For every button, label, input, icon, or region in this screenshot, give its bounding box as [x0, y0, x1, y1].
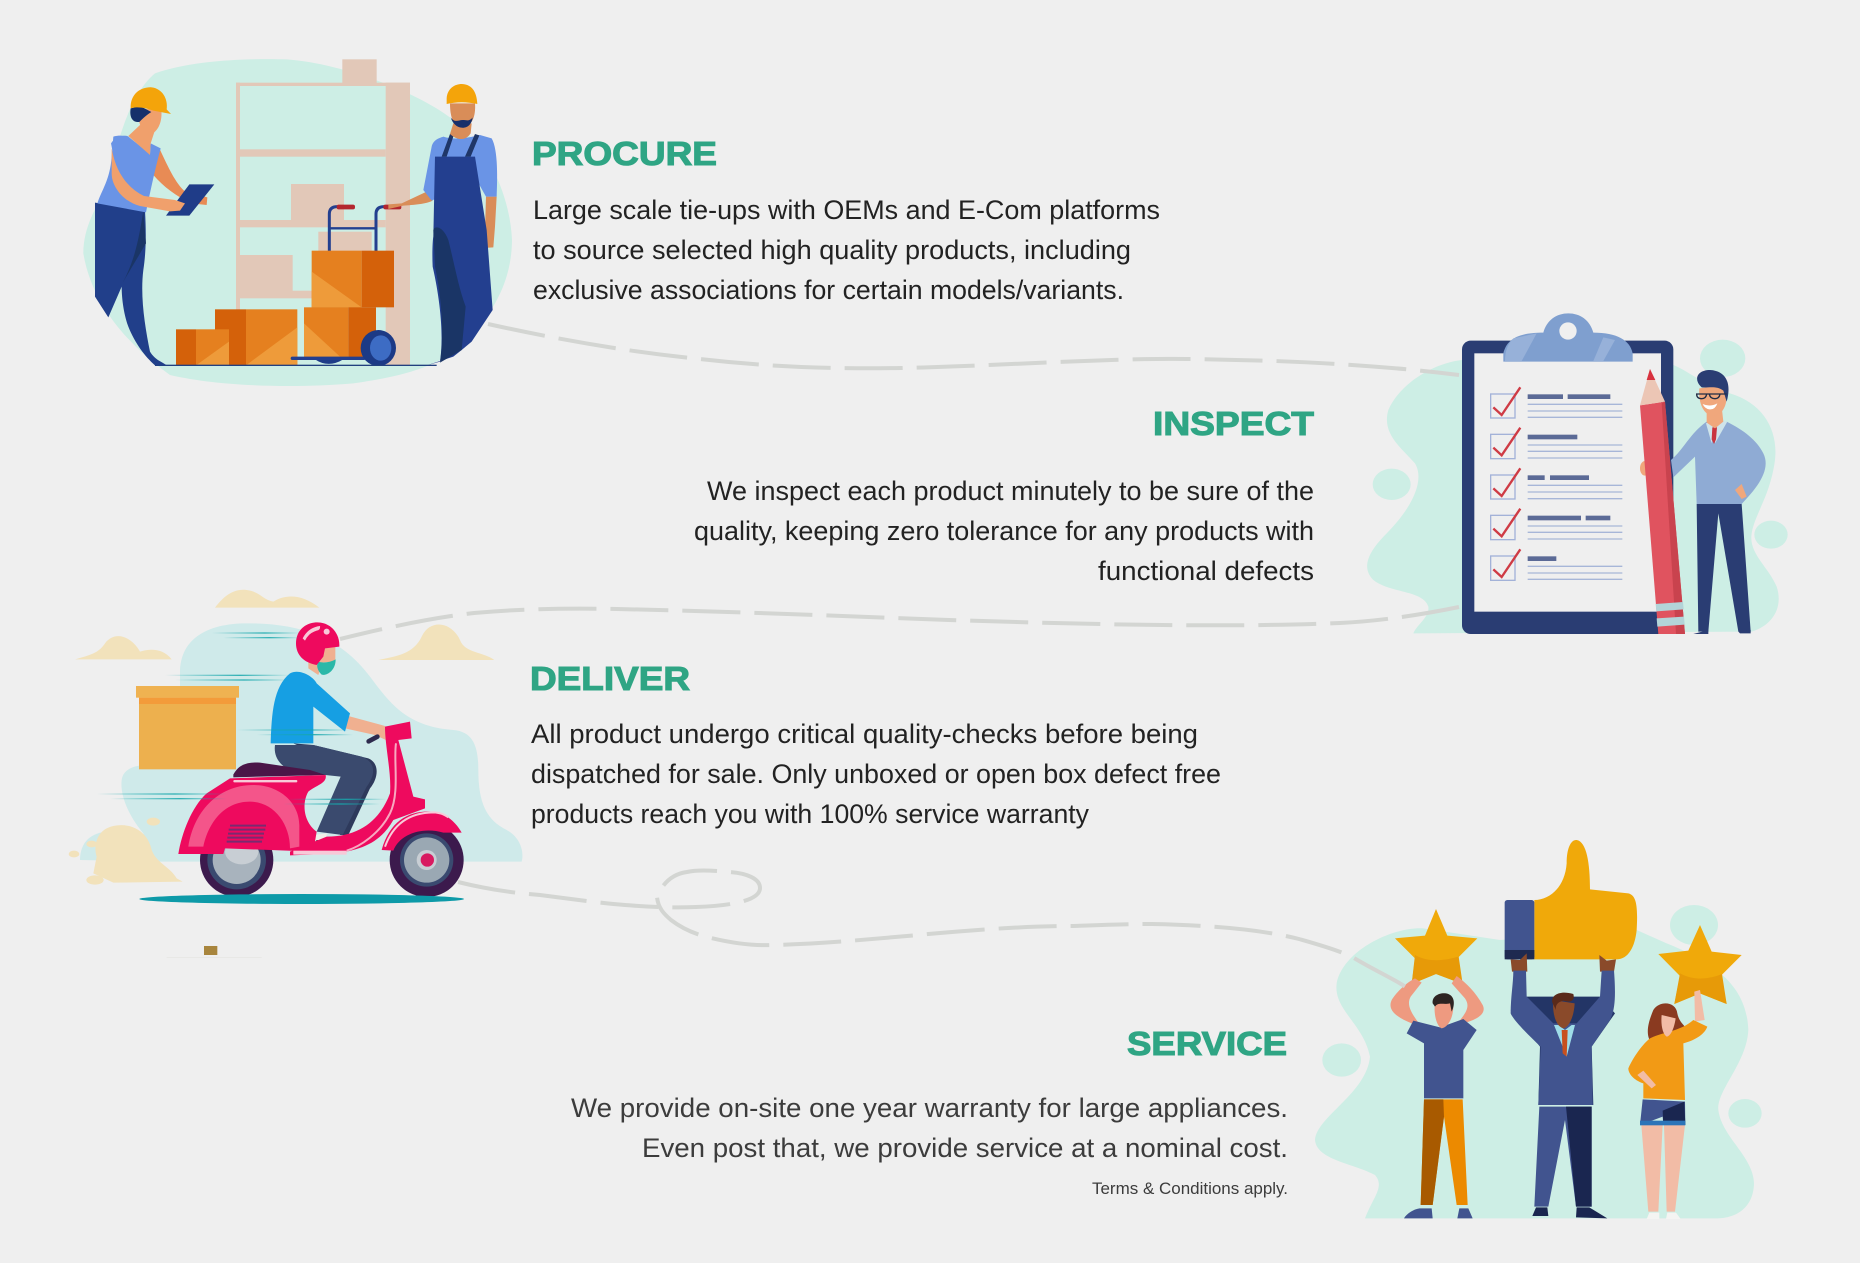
- trolley handles: [329, 207, 384, 307]
- businessman: [1671, 370, 1766, 634]
- warehouse shelves: [236, 59, 410, 365]
- clouds: [75, 590, 494, 660]
- worker with clipboard: [95, 87, 214, 365]
- mint background blob: [83, 59, 512, 386]
- delivery box: [136, 686, 239, 769]
- star left: [1395, 909, 1477, 984]
- mint background blob: [1315, 928, 1754, 1218]
- decorative dots: [1322, 905, 1762, 1128]
- description: to source selected high quality products, including: [533, 235, 1131, 265]
- worker with trolley: [388, 84, 497, 365]
- description: functional defects: [1098, 556, 1314, 586]
- tiny box mark: [167, 946, 262, 958]
- terms note: Terms & Conditions apply.: [1092, 1180, 1288, 1198]
- trolley base and wheels: [291, 330, 396, 366]
- pale smoke blob: [80, 832, 160, 862]
- pale background blob: [121, 623, 522, 862]
- deliver text: [530, 661, 1221, 829]
- heading: INSPECT: [1153, 406, 1315, 443]
- speed lines: [97, 632, 387, 805]
- panel: service illustration: [1315, 840, 1762, 1219]
- dashed connector: deliver to service with loop: [458, 870, 1406, 987]
- dashed connector: procure to inspect: [488, 324, 1459, 375]
- road shadow: [139, 894, 464, 904]
- panel: inspect illustration: [1367, 313, 1788, 634]
- stacked cartons: [176, 251, 394, 365]
- description: [533, 195, 1160, 305]
- description: quality, keeping zero tolerance for any products with: [694, 516, 1314, 546]
- mint background blob: [1367, 360, 1779, 633]
- description: We provide on-site one year warranty for large appliances.: [571, 1093, 1288, 1123]
- clipboard clip: [1503, 313, 1633, 362]
- panel: procure illustration: [83, 59, 512, 386]
- clipboard board: [1462, 341, 1673, 634]
- description: [571, 1093, 1288, 1163]
- inspect text: [694, 406, 1315, 586]
- star right: [1658, 925, 1742, 1004]
- panel: deliver illustration: [69, 590, 522, 958]
- decorative dots: [1373, 340, 1788, 549]
- description: dispatched for sale. Only unboxed or open box defect free: [531, 759, 1221, 789]
- description: Even post that, we provide service at a nominal cost.: [642, 1133, 1288, 1163]
- ground line: [155, 365, 437, 366]
- exhaust smoke: [69, 818, 183, 885]
- description: products reach you with 100% service warranty: [531, 799, 1090, 829]
- rider: [271, 622, 387, 850]
- description: Large scale tie-ups with OEMs and E-Com platforms: [533, 195, 1160, 225]
- scooter wheels: [200, 823, 464, 897]
- giant pencil: [1640, 369, 1685, 634]
- trolley grips: [337, 205, 401, 209]
- heading: PROCURE: [532, 136, 717, 173]
- description: [694, 476, 1314, 586]
- heading: SERVICE: [1127, 1026, 1287, 1063]
- heading: DELIVER: [530, 661, 690, 698]
- description: exclusive associations for certain models/variants.: [533, 275, 1124, 305]
- woman in orange hoodie: [1628, 990, 1707, 1219]
- description: We inspect each product minutely to be sure of the: [707, 476, 1314, 506]
- clipboard paper: [1474, 353, 1661, 612]
- checklist rows: [1491, 387, 1622, 580]
- scooter body: [178, 722, 462, 855]
- description: All product undergo critical quality-checks before being: [531, 719, 1198, 749]
- man in blue t-shirt: [1390, 976, 1484, 1218]
- procure text: [532, 136, 1160, 305]
- service text: [571, 1026, 1288, 1198]
- thumbs up sign: [1505, 840, 1637, 959]
- man in suit: [1511, 953, 1616, 1218]
- description: [531, 719, 1221, 829]
- dashed connector: inspect to deliver: [340, 607, 1459, 639]
